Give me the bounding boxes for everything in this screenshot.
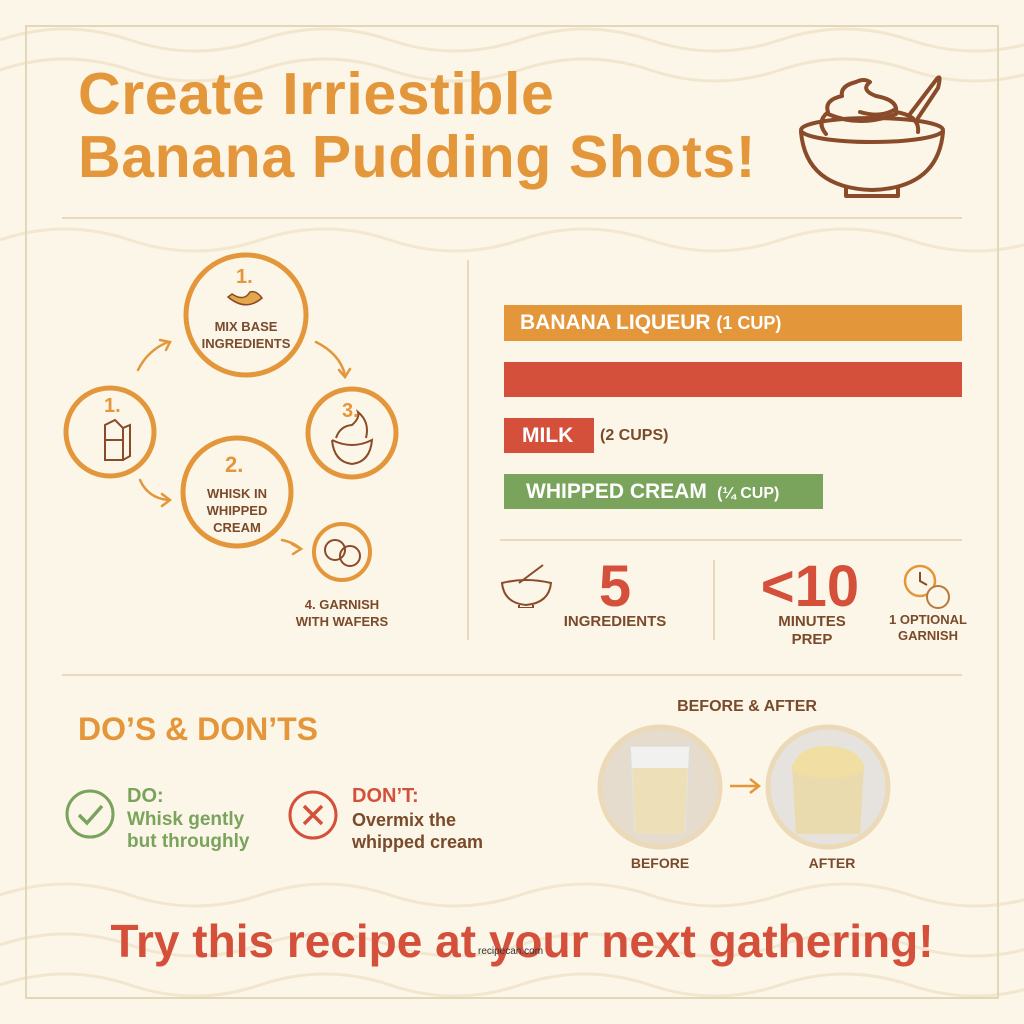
call to action: Try this recipe at your next gathering! bbox=[110, 915, 934, 967]
steps diagram: 1. bbox=[104, 395, 121, 417]
stats: MINUTES bbox=[778, 613, 846, 630]
steps diagram: MIX BASE bbox=[215, 319, 277, 334]
bar chart: ingredients bbox=[504, 305, 962, 509]
title bbox=[78, 61, 756, 190]
do item: DO: bbox=[127, 785, 164, 807]
stats: 5 bbox=[599, 554, 631, 619]
don't item bbox=[288, 785, 483, 852]
steps diagram: WHISK IN bbox=[207, 486, 267, 501]
do item: Whisk gently bbox=[127, 809, 244, 830]
steps diagram: 4. GARNISH bbox=[305, 597, 379, 612]
title: Banana Pudding Shots! bbox=[78, 124, 756, 190]
do item bbox=[66, 785, 250, 852]
stats: GARNISH bbox=[898, 628, 958, 643]
steps diagram: 3. bbox=[342, 400, 359, 422]
steps diagram: WITH WAFERS bbox=[296, 614, 388, 629]
bar chart: ingredients: MILK bbox=[522, 424, 573, 447]
do item: but throughly bbox=[127, 831, 249, 852]
step labels: 1. bbox=[236, 266, 253, 288]
steps diagram: INGREDIENTS bbox=[202, 336, 290, 351]
don't item: Overmix the bbox=[352, 810, 456, 830]
before and after: BEFORE bbox=[631, 855, 689, 871]
heading: do's and don'ts: DO’S & DON’TS bbox=[78, 711, 318, 747]
steps diagram: 2. bbox=[225, 452, 243, 477]
stats bbox=[500, 554, 967, 648]
steps diagram: CREAM bbox=[213, 520, 261, 535]
title: Create Irriestible bbox=[78, 61, 554, 127]
bar chart: ingredients: (2 CUPS) bbox=[600, 427, 668, 444]
don't item: DON’T: bbox=[352, 785, 419, 807]
before and after: BEFORE & AFTER bbox=[677, 698, 817, 715]
stats: INGREDIENTS bbox=[564, 613, 666, 630]
steps diagram: WHIPPED bbox=[207, 503, 267, 518]
before and after bbox=[598, 698, 890, 871]
bar chart: ingredients: BANANA LIQUEUR (1 CUP) bbox=[520, 311, 781, 334]
stats: PREP bbox=[792, 631, 832, 648]
before and after: AFTER bbox=[809, 855, 855, 871]
don't item: whipped cream bbox=[352, 832, 483, 852]
icon: pudding bowl bbox=[799, 75, 945, 198]
stats: 1 OPTIONAL bbox=[889, 612, 967, 627]
stats: <10 bbox=[761, 554, 859, 619]
watermark: recipecan.com bbox=[478, 946, 543, 957]
steps diagram bbox=[64, 252, 398, 629]
bar chart: ingredients: WHIPPED CREAM (¼ CUP) bbox=[526, 480, 779, 503]
